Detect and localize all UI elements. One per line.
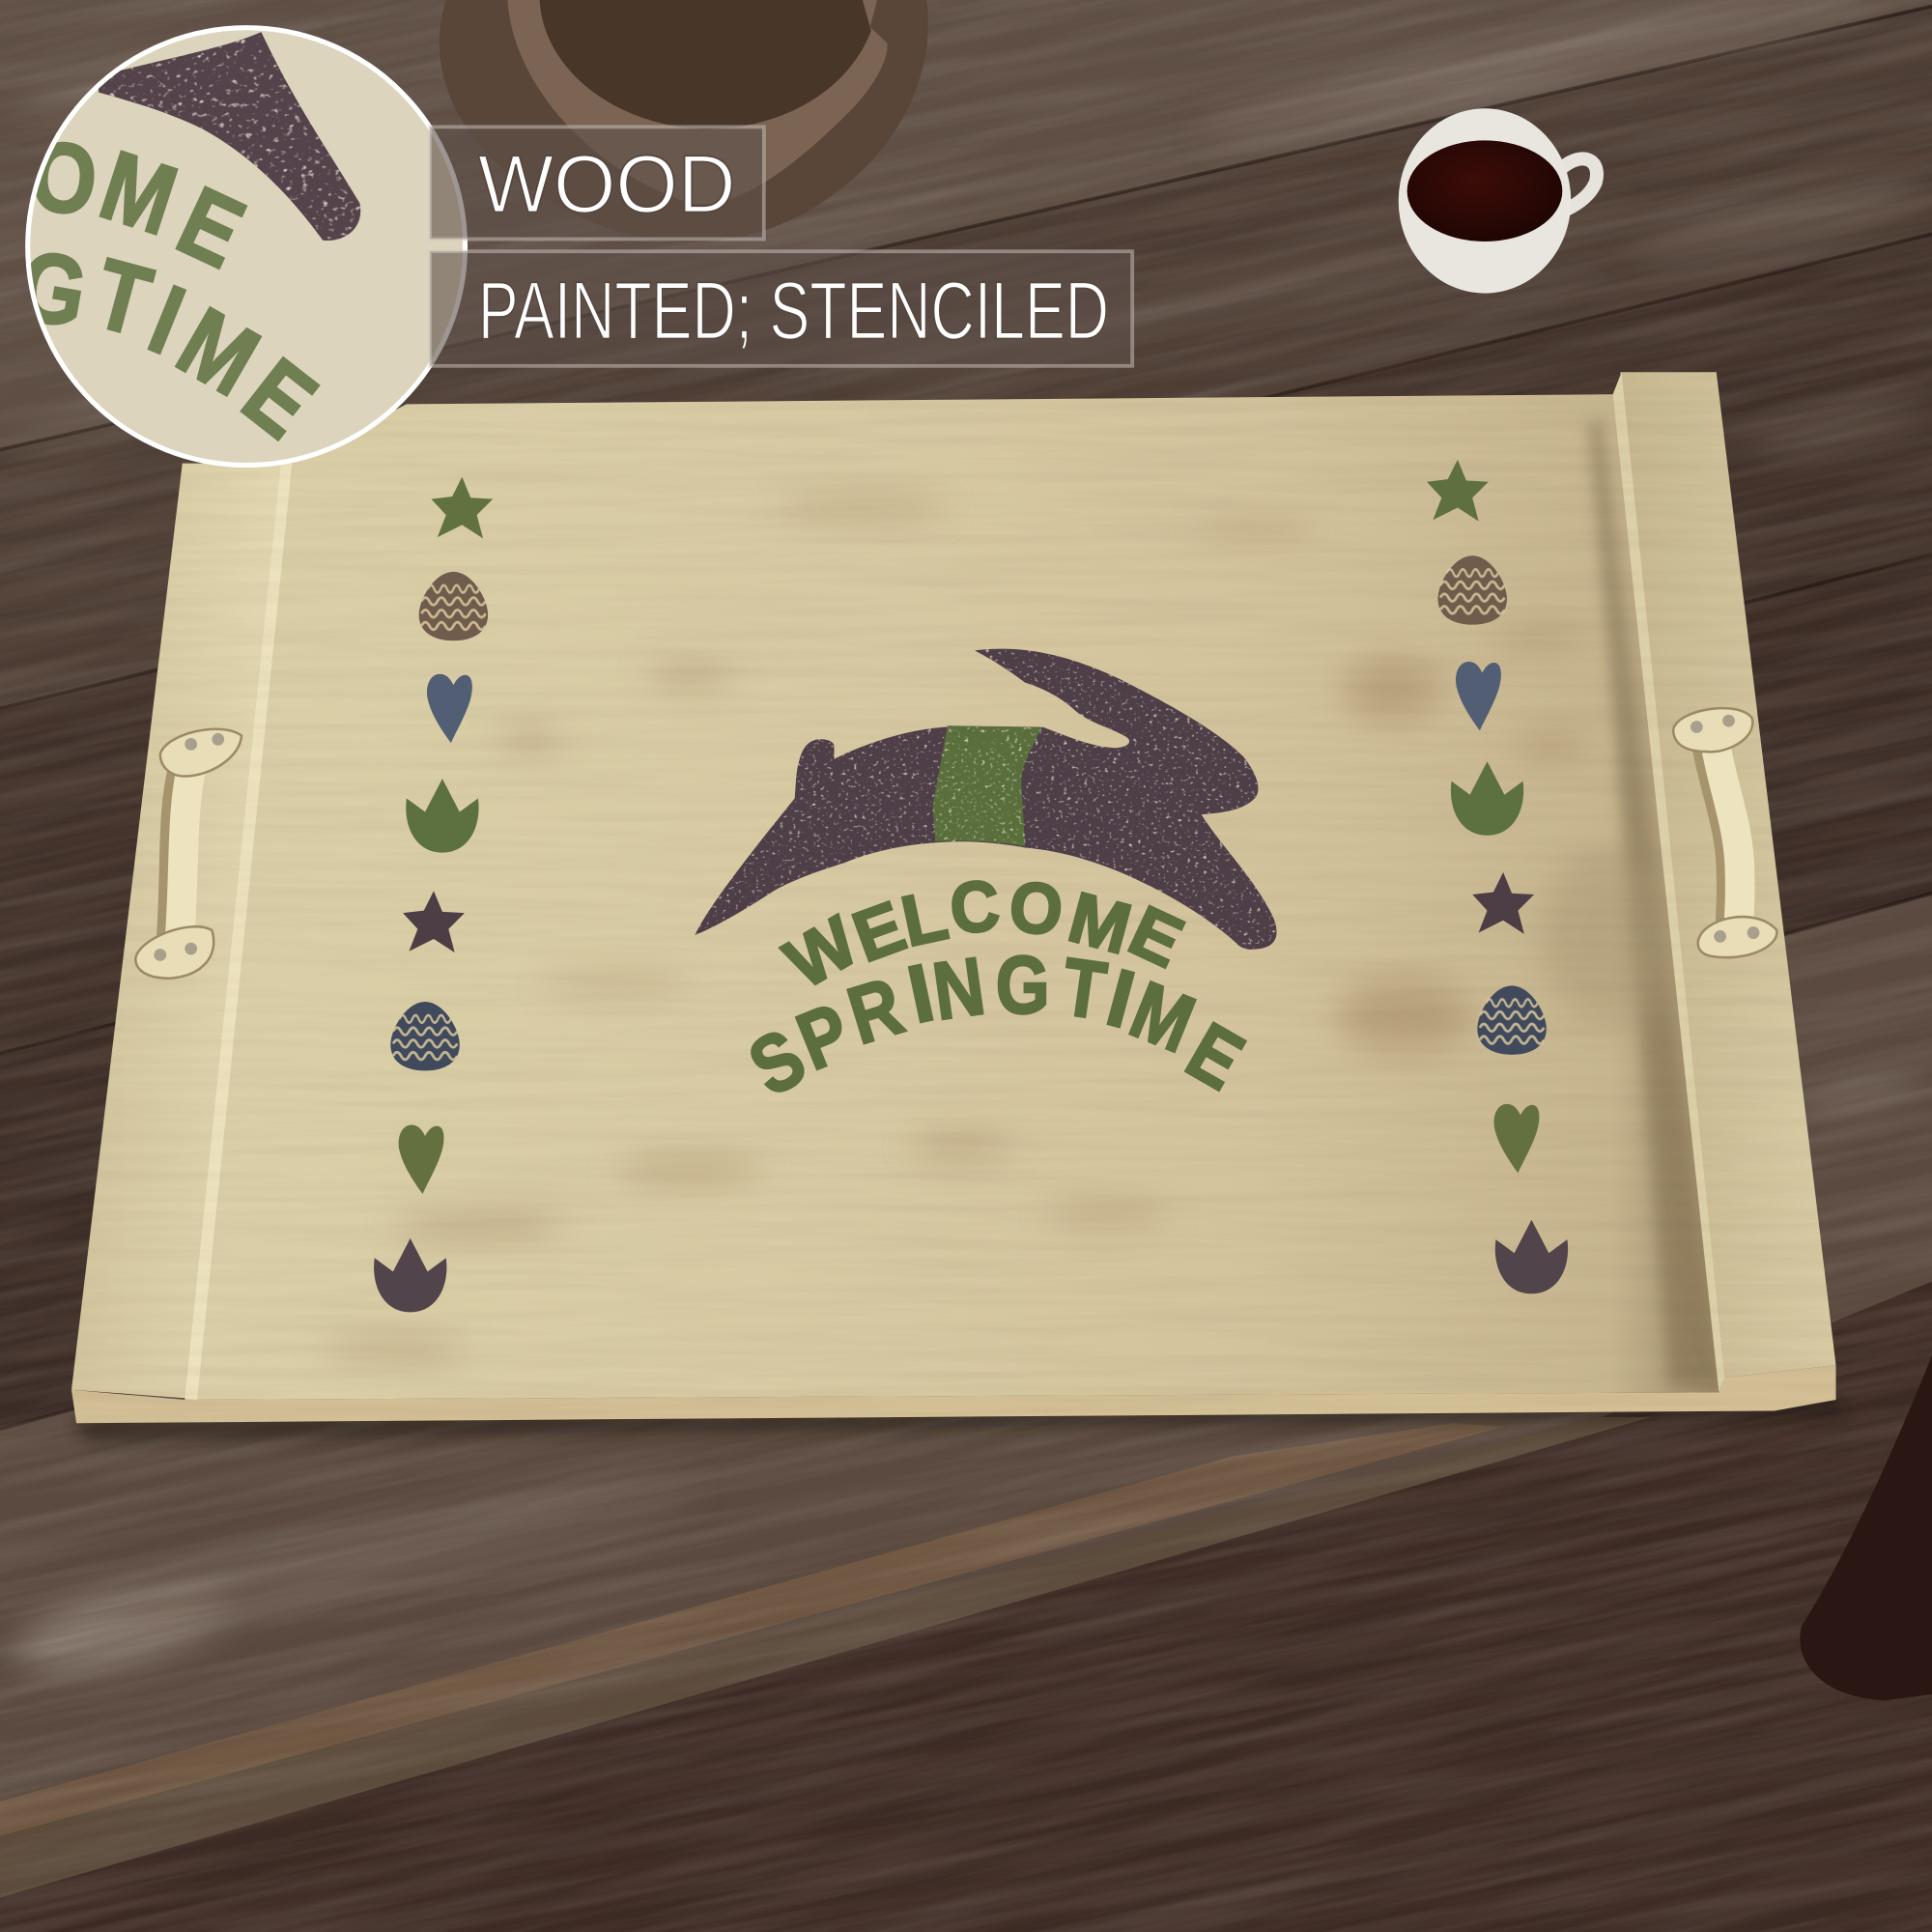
magnified rabbit	[99, 32, 360, 241]
welcome: W	[772, 900, 870, 1004]
coffee cup	[1399, 108, 1597, 294]
magnified text: E	[223, 338, 335, 460]
icon: heart	[427, 674, 472, 743]
magnified text	[31, 141, 321, 442]
table surface below tray	[0, 894, 1932, 1836]
tray shadow	[74, 1399, 1848, 1441]
icon: star	[1427, 460, 1489, 522]
icon: egg	[390, 1002, 460, 1070]
tray panel	[185, 394, 1719, 1400]
right handle	[1673, 708, 1776, 957]
left rail	[71, 464, 291, 1399]
welcome	[772, 867, 1195, 1004]
springtime: I	[900, 947, 941, 1040]
label: wood: WOOD	[478, 138, 735, 229]
bowl inside	[540, 0, 871, 129]
springtime	[734, 939, 1259, 1114]
magnified text: M	[88, 130, 188, 257]
icon: egg	[419, 572, 488, 640]
distress specks	[695, 649, 1277, 950]
rabbit silhouette	[695, 649, 1277, 950]
right rail inner edge	[1613, 372, 1725, 1392]
welcome: M	[1061, 876, 1139, 969]
bowls	[440, 0, 928, 242]
green band	[933, 725, 1042, 846]
welcome: E	[843, 886, 915, 978]
icon: tulip	[374, 1238, 446, 1312]
magnified text: G	[11, 230, 95, 350]
icon: star	[1472, 872, 1534, 934]
left rail inner edge	[185, 464, 292, 1400]
welcome: L	[895, 874, 954, 962]
springtime: M	[1119, 963, 1207, 1070]
welcome: O	[1007, 867, 1065, 951]
magnified text: T	[84, 239, 161, 358]
icon: heart	[1494, 1104, 1539, 1173]
welcome: E	[1118, 890, 1195, 982]
icon: heart	[399, 1125, 444, 1194]
right rail	[1620, 372, 1836, 1378]
icon: tulip	[1495, 1220, 1568, 1293]
springtime: P	[785, 985, 862, 1088]
welcome: C	[947, 867, 1003, 950]
magnified text: O	[27, 121, 101, 237]
egg stripes	[393, 569, 1544, 1060]
panel weathering	[321, 419, 1719, 1386]
magnified text: E	[162, 166, 260, 290]
springtime: T	[1057, 940, 1111, 1037]
tray front edge	[71, 1365, 1836, 1423]
left handle	[135, 729, 242, 979]
magnified text: I	[135, 265, 198, 376]
icon: egg	[1477, 985, 1547, 1055]
right icon column	[1427, 460, 1568, 1293]
magnifier detail circle	[11, 27, 466, 466]
icon: star	[431, 477, 493, 538]
inner bowl	[508, 0, 888, 204]
table front edge	[0, 1417, 1651, 1897]
label: painted; stenciled	[430, 251, 1132, 366]
icon: tulip	[1451, 761, 1523, 836]
table leg	[1800, 1355, 1932, 1700]
springtime: S	[734, 1011, 820, 1114]
outer bowl	[440, 0, 928, 242]
icon: heart	[1456, 662, 1501, 730]
magnified text: M	[160, 287, 276, 417]
label: painted; stenciled: PAINTED; STENCILED	[478, 266, 1109, 356]
springtime: N	[927, 940, 990, 1037]
springtime: G	[996, 939, 1050, 1031]
icon: tulip	[406, 779, 479, 853]
left icon column	[374, 477, 493, 1312]
icon: egg	[1438, 555, 1507, 625]
springtime: E	[1173, 1005, 1259, 1107]
wooden tray	[71, 372, 1835, 1424]
icon: star	[403, 891, 465, 952]
springtime: I	[1098, 952, 1144, 1045]
springtime: R	[838, 959, 913, 1062]
slogan	[734, 867, 1259, 1114]
label: wood	[430, 127, 764, 239]
